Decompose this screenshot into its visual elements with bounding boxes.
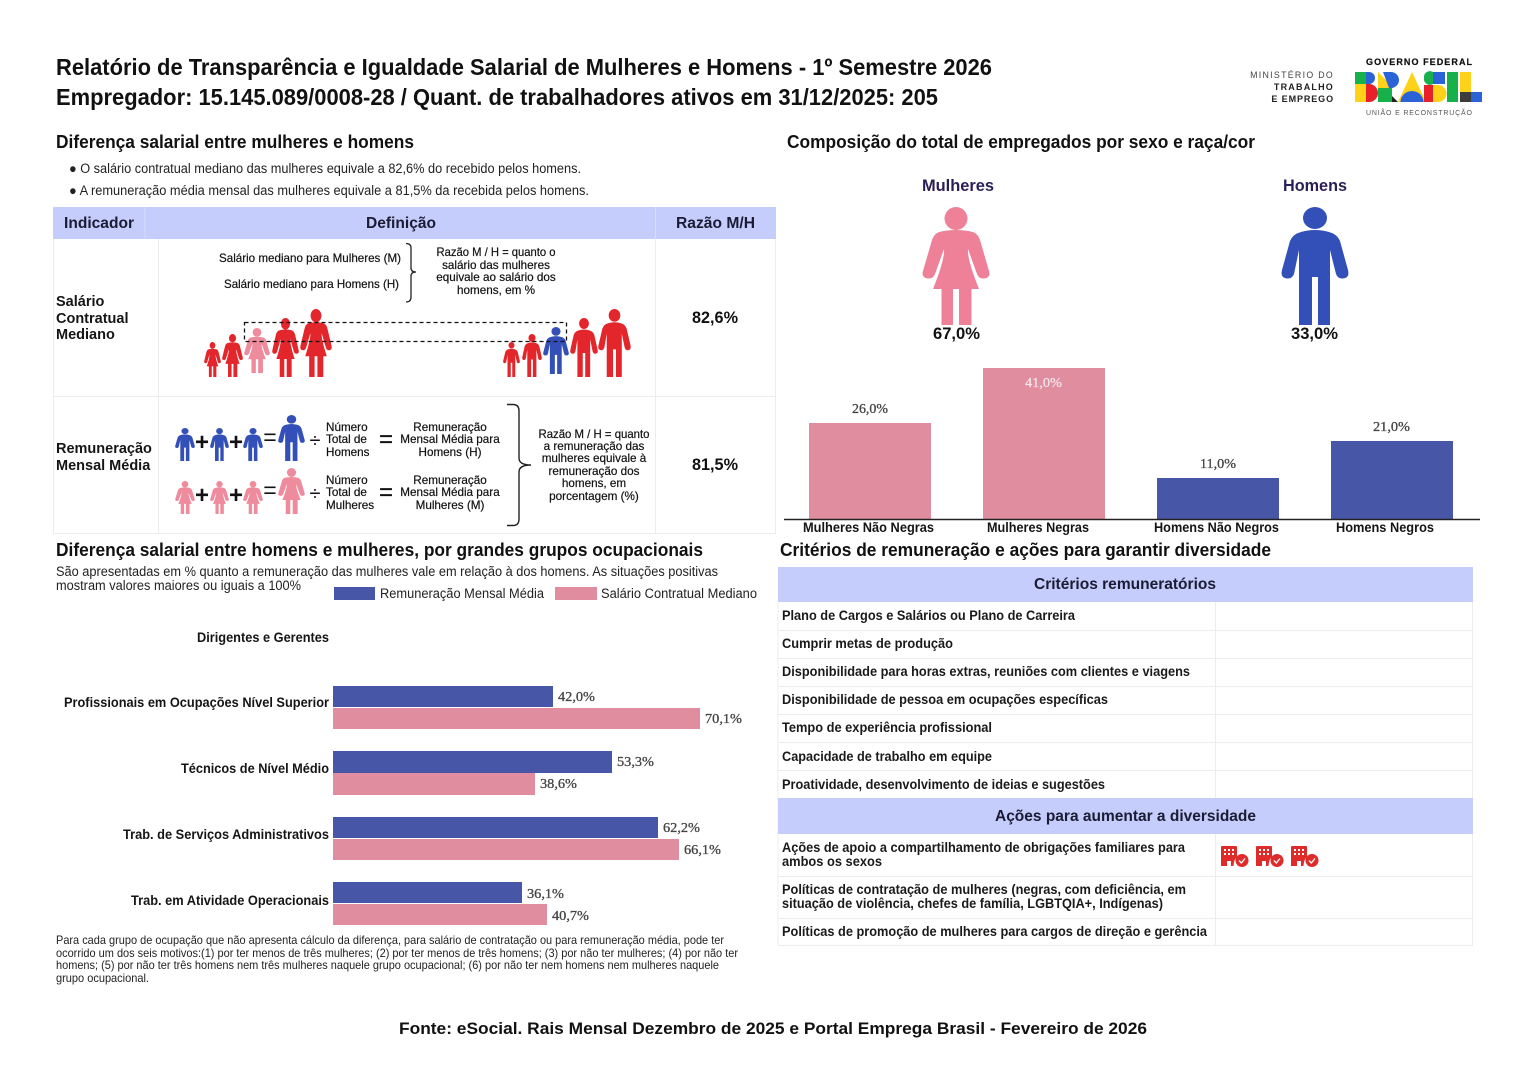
list: critérios xyxy=(782,608,1190,792)
header: ações xyxy=(778,798,1473,834)
row: remuneração mensal média: a remuneração das xyxy=(544,440,645,453)
header: critérios remuneratórios: Critérios remuneratórios xyxy=(1034,576,1216,593)
row: salário contratual mediano xyxy=(56,244,738,377)
bar chart: grupos ocupacionais: 62,2% xyxy=(663,821,700,836)
bar chart: grupos ocupacionais: 70,1% xyxy=(705,712,742,727)
bar chart: grupos ocupacionais: 40,7% xyxy=(552,909,589,924)
formula: homens: + xyxy=(195,429,209,456)
text block: explicação: São apresentadas em % quanto a remuneração das mulheres vale em relação à dos homens. As situações positivas xyxy=(56,564,718,579)
bar chart: grupos ocupacionais: Trab. em Atividade Operacionais xyxy=(131,893,329,908)
title xyxy=(56,54,992,110)
table header xyxy=(53,207,776,239)
list: critérios: Capacidade de trabalho em equipe xyxy=(782,749,992,764)
formula: mulheres: + xyxy=(195,482,209,509)
text block: resumo: ● A remuneração média mensal das mulheres equivale a 81,5% da recebida pelos homens. xyxy=(69,183,589,198)
panel: homens: Homens xyxy=(1283,176,1347,195)
bar chart: composição por sexo e raça: 11,0% xyxy=(1200,457,1236,472)
title: Relatório de Transparência e Igualdade Salarial de Mulheres e Homens - 1º Semestre 2026 xyxy=(56,54,992,80)
row: remuneração mensal média: 81,5% xyxy=(692,455,738,474)
row: remuneração mensal média: Razão M / H = quanto xyxy=(538,428,650,441)
logo: ministério do trabalho e emprego xyxy=(1250,70,1334,104)
text block: nota de rodapé: grupo ocupacional. xyxy=(56,971,149,985)
row: salário contratual mediano: Salário mediano para Homens (H) xyxy=(224,278,399,291)
heading: diferença salarial: Diferença salarial entre mulheres e homens xyxy=(56,132,414,152)
bar chart: grupos ocupacionais: 53,3% xyxy=(617,755,654,770)
heading: composição: Composição do total de empregados por sexo e raça/cor xyxy=(787,132,1255,152)
row: salário contratual mediano: Razão M / H = quanto o xyxy=(436,246,556,259)
bar chart: grupos ocupacionais: Dirigentes e Gerentes xyxy=(197,630,329,645)
logo: governo federal brasil: UNIÃO E RECONSTRUÇÃO xyxy=(1366,108,1473,117)
bar chart: grupos ocupacionais: 66,1% xyxy=(684,843,721,858)
text block: nota de rodapé xyxy=(56,933,738,985)
bar chart: grupos ocupacionais: Trab. de Serviços Administrativos xyxy=(123,827,329,842)
formula: mulheres: Mulheres xyxy=(326,499,374,512)
list: ações xyxy=(782,840,1207,939)
fonte: Fonte: eSocial. Rais Mensal Dezembro de 2025 e Portal Emprega Brasil - Fevereiro de 2026 xyxy=(399,1019,1147,1038)
panel: homens xyxy=(1282,176,1348,343)
list: critérios: Tempo de experiência profissional xyxy=(782,720,992,735)
formula: homens: Número xyxy=(326,421,368,434)
logo: ministério do trabalho e emprego: MINISTÉRIO DO xyxy=(1250,70,1334,80)
icon: homem xyxy=(1282,207,1348,325)
icons: homens xyxy=(503,309,631,377)
formula: homens: Remuneração xyxy=(413,421,487,434)
panel: mulheres: 67,0% xyxy=(933,324,980,343)
formula: homens: Homens (H) xyxy=(418,446,482,459)
row: salário contratual mediano: Mediano xyxy=(56,327,115,343)
bar chart: grupos ocupacionais: Profissionais em Ocupações Nível Superior xyxy=(64,695,330,710)
logo: governo federal brasil: GOVERNO FEDERAL xyxy=(1366,57,1472,67)
list: ações: Políticas de contratação de mulheres (negras, com deficiência, em xyxy=(782,882,1186,897)
bar chart: composição por sexo e raça: 26,0% xyxy=(852,402,888,417)
bar chart: composição por sexo e raça: 21,0% xyxy=(1373,420,1410,435)
legend xyxy=(334,586,757,601)
title: Empregador: 15.145.089/0008-28 / Quant. de trabalhadores ativos em 31/12/2025: 205 xyxy=(56,84,938,110)
formula: mulheres: ÷ xyxy=(310,483,321,505)
panel: mulheres: Mulheres xyxy=(922,176,994,195)
formula: mulheres: + xyxy=(229,482,243,509)
logo: governo federal brasil xyxy=(1355,57,1482,117)
formula: mulheres: Mulheres (M) xyxy=(416,499,485,512)
text block: nota de rodapé: Para cada grupo de ocupação que não apresenta cálculo da diferença, para salário de contratação ou para remuneração média, pode ter xyxy=(56,933,724,947)
list: ações: Políticas de promoção de mulheres para cargos de direção e gerência xyxy=(782,924,1207,939)
row: remuneração mensal média: remuneração dos xyxy=(549,465,640,478)
bar chart: composição por sexo e raça xyxy=(784,368,1480,535)
formula: homens: Total de xyxy=(326,433,367,446)
row: remuneração mensal média: porcentagem (%) xyxy=(549,490,639,503)
legend: Remuneração Mensal Média xyxy=(380,586,544,601)
header: critérios remuneratórios xyxy=(778,567,1473,602)
bar chart: composição por sexo e raça: Homens Não Negros xyxy=(1154,520,1279,535)
bar chart: grupos ocupacionais: 38,6% xyxy=(540,777,577,792)
bar chart: grupos ocupacionais: 36,1% xyxy=(527,887,564,902)
list: critérios: Plano de Cargos e Salários ou Plano de Carreira xyxy=(782,608,1075,623)
row: remuneração mensal média: Mensal Média xyxy=(56,458,151,474)
logo: ministério do trabalho e emprego: TRABALHO xyxy=(1274,82,1334,92)
row: remuneração mensal média: mulheres equivale à xyxy=(542,452,647,465)
list: ações: situação de violência, chefes de família, LGBTQIA+, Indígenas) xyxy=(782,896,1163,911)
legend: Salário Contratual Mediano xyxy=(601,586,757,601)
text block: nota de rodapé: ocorrido um dos seis motivos:(1) por ter menos de três mulheres; (2) por ter menos de três homens; (3) por não ter mulheres; (4) por não ter xyxy=(56,946,738,960)
table header: Razão M/H xyxy=(676,215,755,232)
text block: resumo xyxy=(69,161,589,198)
formula: mulheres: = xyxy=(263,477,277,503)
bar chart: grupos ocupacionais xyxy=(64,630,742,925)
logo: ministério do trabalho e emprego: E EMPREGO xyxy=(1271,94,1334,104)
formula: homens: ÷ xyxy=(310,430,321,452)
heading: critérios: Critérios de remuneração e ações para garantir diversidade xyxy=(780,540,1271,560)
row: salário contratual mediano: salário das mulheres xyxy=(442,259,550,272)
panel: tabela de critérios e ações xyxy=(778,567,1473,946)
icons: empresas com selo xyxy=(1221,846,1318,867)
formula: mulheres: = xyxy=(379,479,393,506)
heading: grupos ocupacionais: Diferença salarial entre homens e mulheres, por grandes grupos ocupacionais xyxy=(56,540,703,560)
panel: mulheres xyxy=(922,176,994,343)
list: critérios: Disponibilidade para horas extras, reuniões com clientes e viagens xyxy=(782,664,1190,679)
header: ações: Ações para aumentar a diversidade xyxy=(995,808,1256,825)
row: salário contratual mediano: homens, em % xyxy=(457,284,535,297)
row: salário contratual mediano: Salário mediano para Mulheres (M) xyxy=(219,252,401,265)
formula: mulheres xyxy=(175,468,500,514)
formula: homens: = xyxy=(263,424,277,450)
bar chart: composição por sexo e raça: Mulheres Não Negras xyxy=(803,520,934,535)
text block: nota de rodapé: homens; (5) por não ter três homens nem três mulheres naquele grupo ocupacional; (6) por não ter nem homens nem mulheres naquele xyxy=(56,958,719,972)
formula: homens: Mensal Média para xyxy=(400,433,500,446)
bar chart: composição por sexo e raça: 41,0% xyxy=(1025,376,1062,391)
text block: explicação: mostram valores maiores ou iguais a 100% xyxy=(56,578,301,593)
row: remuneração mensal média: Remuneração xyxy=(56,441,152,457)
icons: mulheres xyxy=(204,309,332,377)
row: salário contratual mediano: Contratual xyxy=(56,311,128,327)
text block: resumo: ● O salário contratual mediano das mulheres equivale a 82,6% do recebido pelos homens. xyxy=(69,161,581,176)
bar chart: composição por sexo e raça: Homens Negros xyxy=(1336,520,1434,535)
row: remuneração mensal média xyxy=(56,404,738,526)
formula: homens: + xyxy=(229,429,243,456)
panel: tabela de indicadores xyxy=(53,207,776,534)
table header: Definição xyxy=(366,215,436,232)
text block: explicação xyxy=(56,564,718,593)
list: critérios: Cumprir metas de produção xyxy=(782,636,953,651)
formula: homens: = xyxy=(379,426,393,453)
row: salário contratual mediano: equivale ao salário dos xyxy=(436,271,556,284)
list: critérios: Proatividade, desenvolvimento de ideias e sugestões xyxy=(782,777,1105,792)
table header: Indicador xyxy=(64,215,134,232)
formula: mulheres: Mensal Média para xyxy=(400,486,500,499)
list: critérios: Disponibilidade de pessoa em ocupações específicas xyxy=(782,692,1108,707)
formula: homens xyxy=(175,415,500,461)
panel: homens: 33,0% xyxy=(1291,324,1338,343)
row: salário contratual mediano: Salário xyxy=(56,294,104,310)
row: salário contratual mediano: 82,6% xyxy=(692,308,738,327)
formula: mulheres: Remuneração xyxy=(413,474,487,487)
formula: homens: Homens xyxy=(326,446,370,459)
list: ações: Ações de apoio a compartilhamento de obrigações familiares para xyxy=(782,840,1185,855)
list: ações: ambos os sexos xyxy=(782,854,882,869)
icon: mulher xyxy=(923,207,989,325)
bar chart: grupos ocupacionais: 42,0% xyxy=(558,690,595,705)
bar chart: composição por sexo e raça: Mulheres Negras xyxy=(987,520,1089,535)
row: remuneração mensal média: homens, em xyxy=(562,477,626,490)
formula: mulheres: Número xyxy=(326,474,368,487)
bar chart: grupos ocupacionais: Técnicos de Nível Médio xyxy=(181,761,329,776)
formula: mulheres: Total de xyxy=(326,486,367,499)
